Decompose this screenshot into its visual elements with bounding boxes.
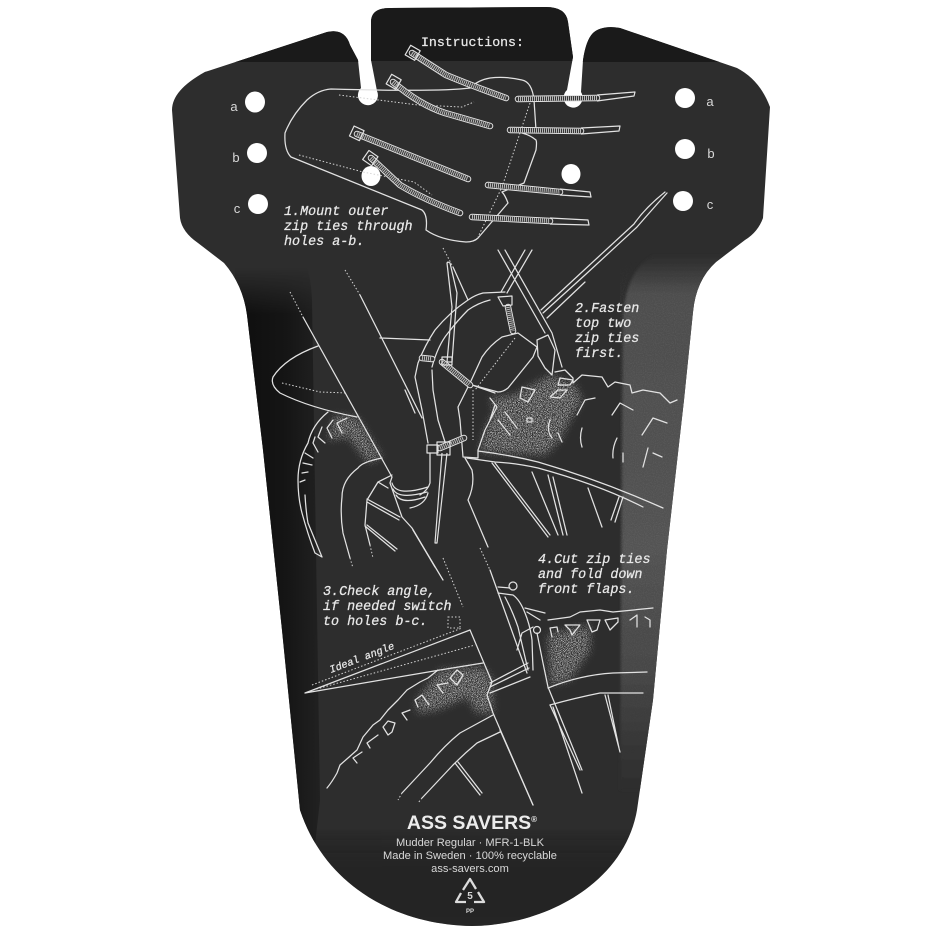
lower tie tail bbox=[427, 442, 450, 543]
step 2 text: first. bbox=[575, 347, 623, 362]
step 2 illustration bbox=[272, 192, 677, 568]
step 4 text: 4.Cut zip ties bbox=[538, 553, 650, 568]
step 3 text: if needed switch bbox=[323, 600, 452, 615]
hole labels: c bbox=[234, 201, 241, 216]
lower right tire bbox=[548, 608, 653, 752]
product details: Made in Sweden · 100% recyclable bbox=[383, 850, 557, 862]
step 3 text: 3.Check angle, bbox=[323, 585, 436, 600]
recycling symbol bbox=[456, 879, 484, 915]
step 1 text: holes a-b. bbox=[284, 235, 364, 250]
mounting holes bbox=[245, 88, 695, 214]
step 3 and 4 illustration bbox=[305, 530, 653, 805]
lower rim and spokes bbox=[402, 715, 533, 805]
brand name: ASS SAVERS bbox=[407, 812, 531, 834]
fork mudguard bbox=[405, 267, 505, 495]
instructions heading: Instructions: bbox=[421, 35, 524, 50]
recycling symbol: PP bbox=[466, 909, 474, 915]
hole labels: c bbox=[707, 197, 714, 212]
product details: Mudder Regular · MFR-1-BLK bbox=[396, 837, 545, 849]
hole labels: b bbox=[232, 150, 240, 165]
lower left tire bbox=[327, 670, 463, 788]
right tire bbox=[490, 370, 677, 467]
step 4 text: front flaps. bbox=[538, 583, 634, 598]
ideal angle label: Ideal angle bbox=[328, 641, 396, 677]
mudguard body bbox=[172, 7, 770, 926]
product details bbox=[383, 837, 557, 875]
recycling symbol: 5 bbox=[467, 891, 473, 902]
brand name: ® bbox=[531, 815, 537, 824]
hole labels: b bbox=[707, 146, 715, 161]
hole labels: a bbox=[706, 94, 714, 109]
product details: ass-savers.com bbox=[431, 863, 509, 875]
fork tie bbox=[490, 587, 582, 793]
step 1 saddle illustration bbox=[285, 45, 635, 242]
step 3 text: to holes b-c. bbox=[323, 615, 427, 630]
step 1 text: 1.Mount outer bbox=[284, 205, 388, 220]
hub and spokes bbox=[350, 475, 428, 568]
left tire bbox=[298, 412, 382, 558]
zip ties left bbox=[349, 45, 506, 213]
crossing zip ties bbox=[498, 192, 667, 375]
step 2 text: zip ties bbox=[575, 332, 639, 347]
spokes bbox=[492, 463, 623, 537]
step 2 text: top two bbox=[575, 317, 631, 332]
step 1 text: zip ties through bbox=[284, 220, 413, 235]
angle lines bbox=[305, 630, 483, 693]
step 2 text: 2.Fasten bbox=[575, 302, 639, 317]
hole labels: a bbox=[230, 99, 238, 114]
left fender bbox=[272, 346, 357, 417]
mudguard zip ties bbox=[422, 262, 513, 543]
front fender lines bbox=[465, 451, 663, 547]
step 4 text: and fold down bbox=[538, 568, 642, 583]
hole labels bbox=[230, 94, 715, 216]
upper tie tail bbox=[447, 262, 457, 362]
zip ties right bbox=[472, 92, 635, 225]
